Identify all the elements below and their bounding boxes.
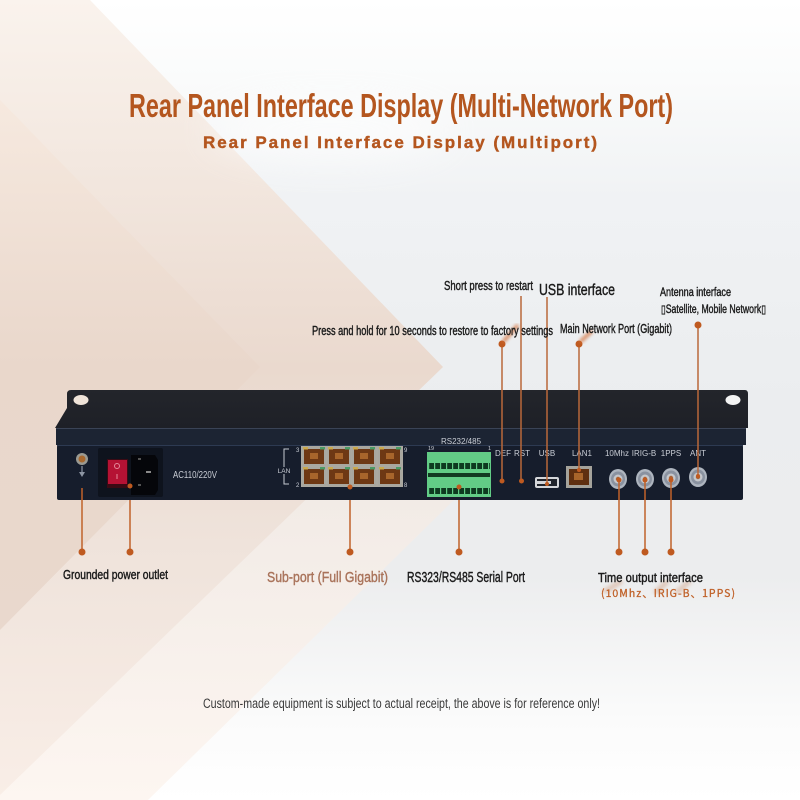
label: short press: Short press to restart — [444, 279, 533, 293]
RS232/485 terminal block: RS232/485 — [441, 437, 482, 446]
RS232/485 terminal block: 1 — [488, 446, 491, 452]
callout dots bottom — [78, 478, 674, 556]
label: grounded power outlet: Grounded power outlet — [63, 568, 168, 582]
label: serial port: RS323/RS485 Serial Port — [407, 569, 526, 586]
rear face — [57, 445, 743, 500]
callout lines top — [502, 296, 698, 484]
RST label: RST — [514, 449, 530, 458]
LAN sub-ports — [278, 446, 408, 489]
LAN sub-ports: LAN — [278, 468, 291, 475]
LAN1 port — [566, 466, 592, 488]
1PPS label: 1PPS — [661, 449, 681, 458]
orange glow smudges — [503, 325, 592, 342]
front lip — [56, 428, 746, 445]
label: time output interface: Time output interface — [598, 571, 703, 585]
footer note: Custom-made equipment is subject to actual receipt, the above is for reference only! — [203, 696, 600, 711]
RS232/485 terminal block: 19 — [428, 446, 434, 452]
subtitle: Rear Panel Interface Display (Multiport) — [203, 133, 597, 152]
IRIG-B label: IRIG-B — [632, 449, 656, 458]
USB port — [535, 477, 559, 488]
power inlet and rocker switch — [98, 448, 163, 497]
label: antenna interface: Antenna interface — [660, 287, 731, 299]
USB label: USB — [539, 449, 555, 458]
label: antenna networks: ▯Satellite, Mobile Network▯ — [661, 304, 766, 316]
device: rack chassis rear panel — [55, 390, 748, 500]
label: sub-port: Sub-port (Full Gigabit) — [267, 569, 388, 586]
DEF label: DEF — [495, 449, 511, 458]
time label smudges — [604, 581, 690, 593]
AC voltage label: AC110/220V — [173, 470, 217, 481]
callout dots top — [498, 322, 702, 486]
LAN sub-ports: 8 — [404, 483, 408, 489]
label: factory reset: Press and hold for 10 seconds to restore to factory settings — [312, 324, 553, 338]
RS232/485 terminal block — [427, 437, 491, 497]
label: USB interface: USB interface — [539, 282, 615, 299]
10Mhz label: 10Mhz — [605, 449, 629, 458]
LAN1 label: LAN1 — [572, 449, 593, 458]
label: main network port: Main Network Port (Gigabit) — [560, 322, 672, 336]
ANT label: ANT — [690, 449, 706, 458]
ground screw — [76, 453, 88, 477]
LAN sub-ports: 9 — [404, 448, 408, 454]
label: time output signals: (10Mhz、IRIG-B、1PPS) — [601, 586, 735, 601]
BNC connectors — [609, 467, 707, 489]
chassis top face with mounting ears — [55, 390, 748, 428]
LAN sub-ports: 3 — [296, 448, 300, 454]
LAN sub-ports: 2 — [296, 483, 300, 489]
callout lines bottom — [82, 480, 671, 552]
